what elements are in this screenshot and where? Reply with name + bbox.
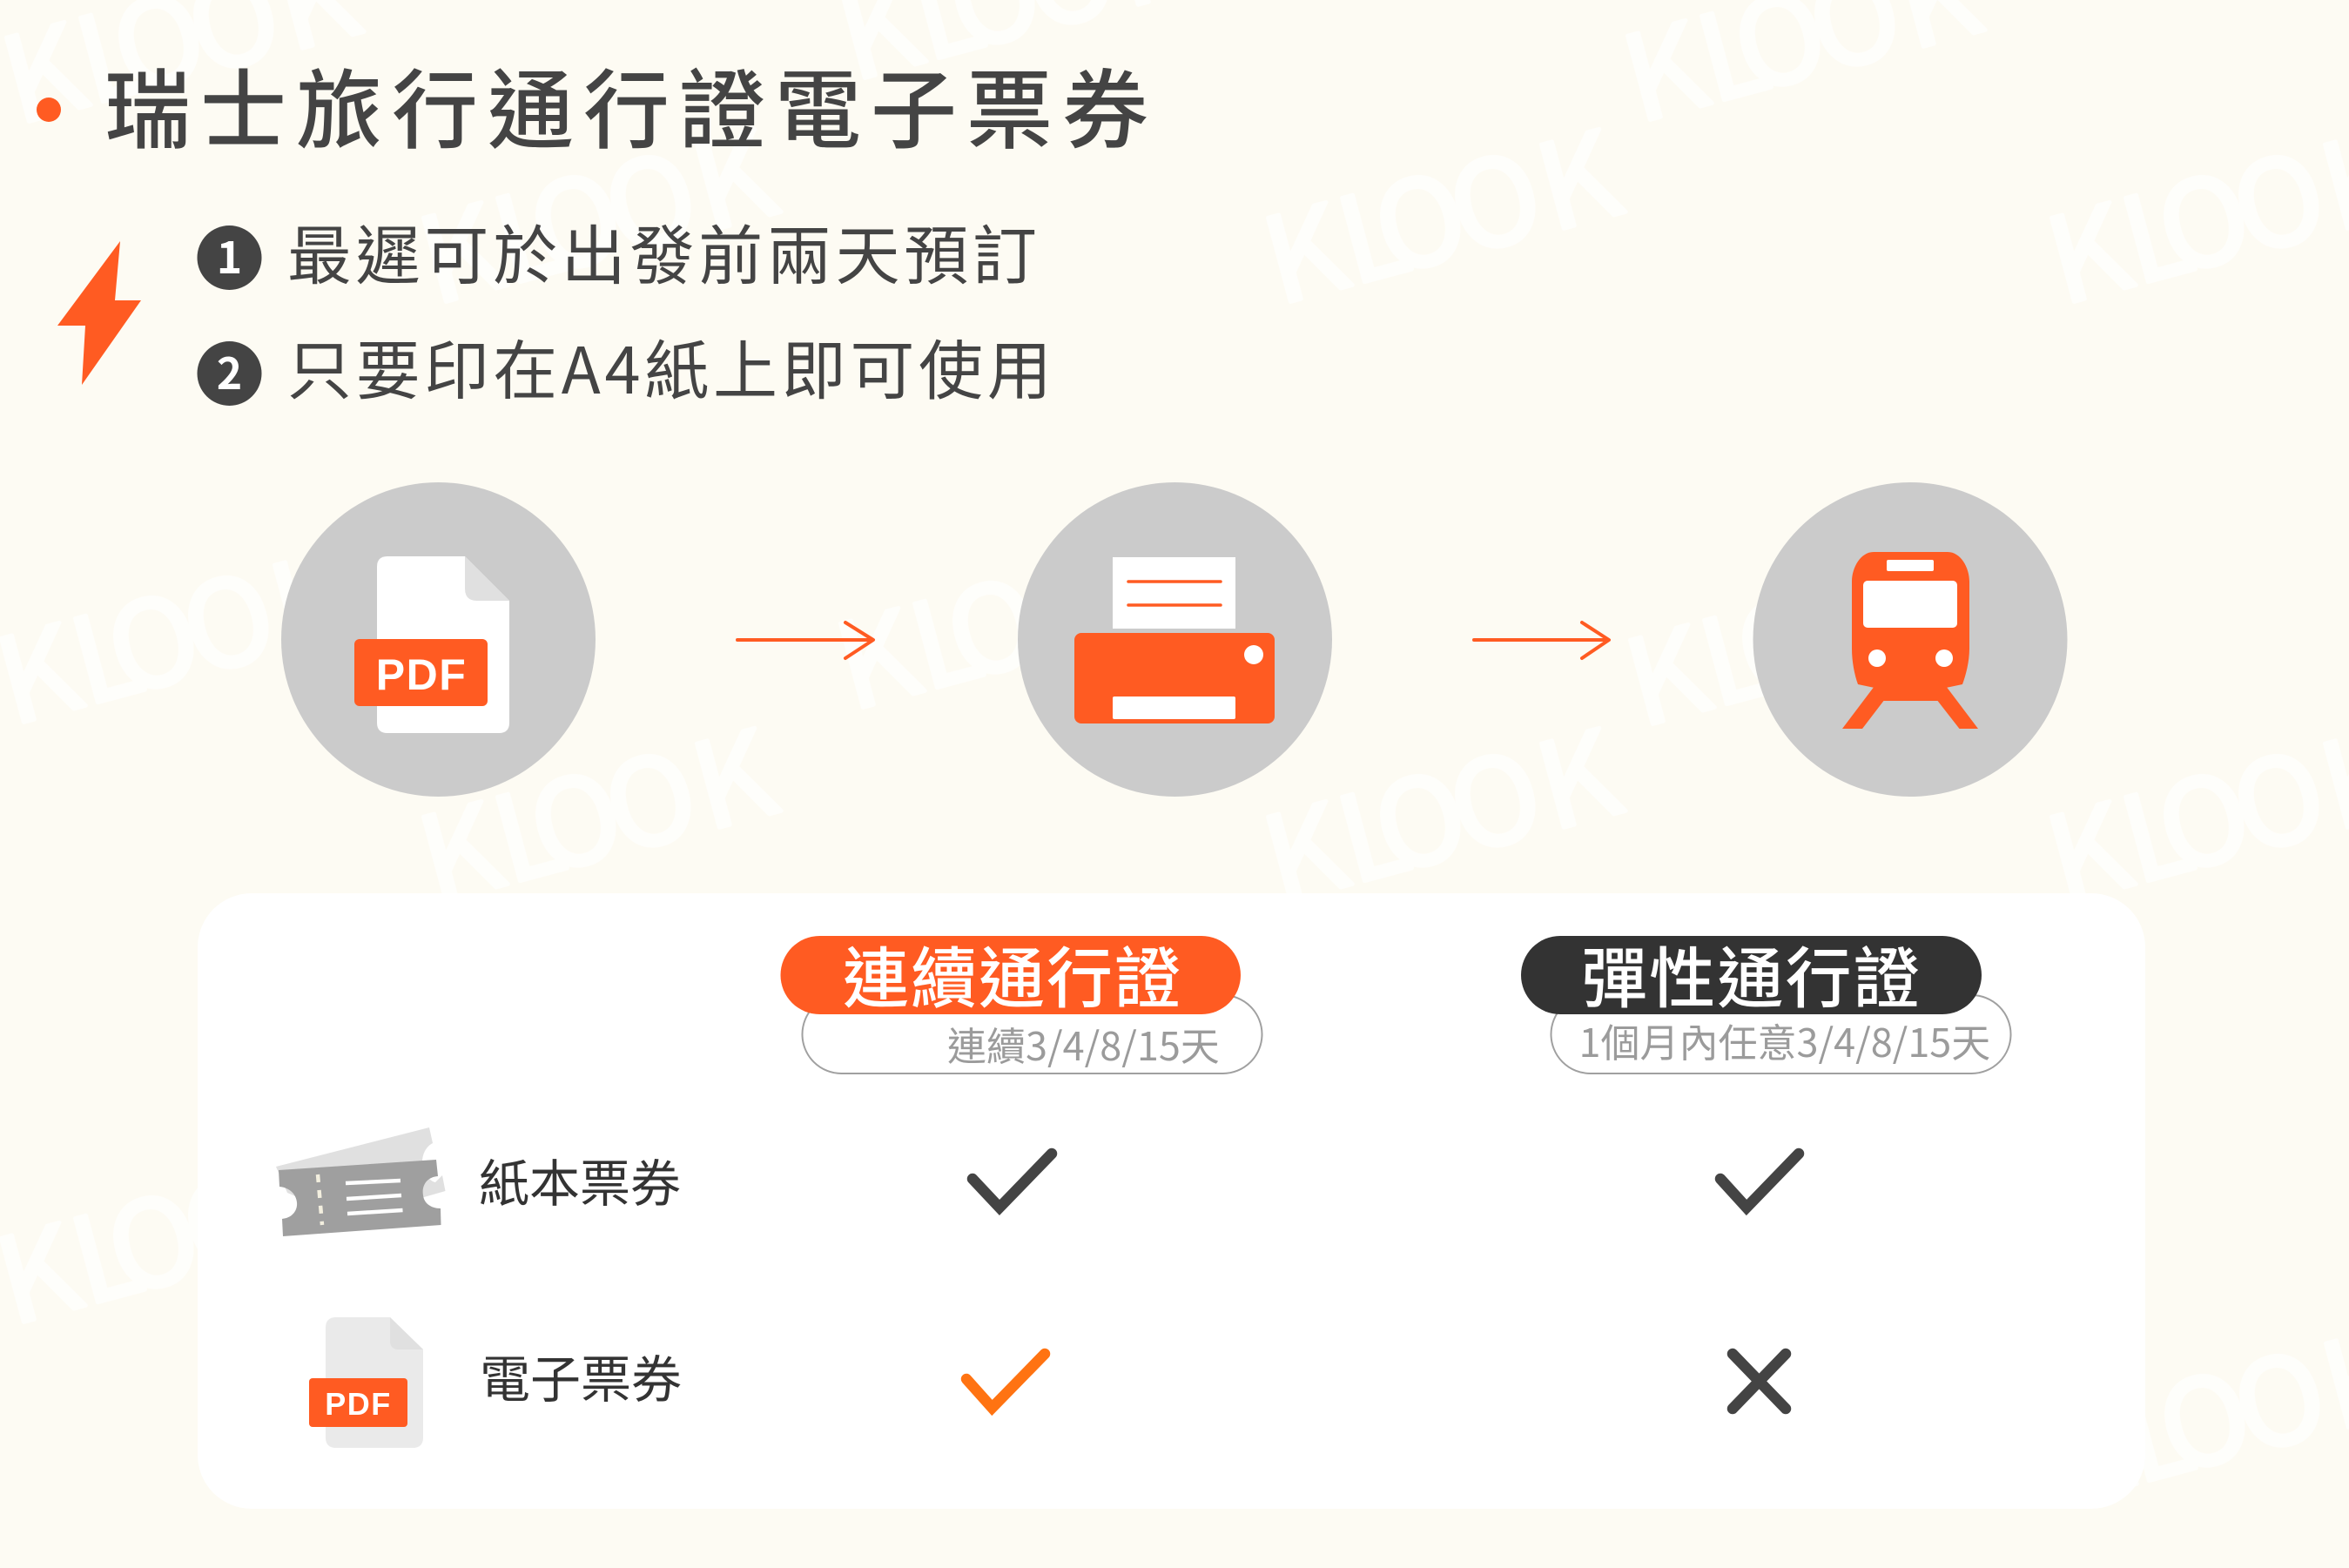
icon: PDF file small	[309, 1317, 423, 1448]
panel: ticket comparison table	[198, 893, 2145, 1509]
duration text: 1個月內任意3/4/8/15天	[1579, 1012, 1990, 1068]
heading pill	[780, 936, 1241, 1014]
card background	[198, 893, 2145, 1509]
KLOOK watermark pattern: KLOOK	[399, 678, 791, 938]
arrow: printer to train	[1474, 622, 1609, 658]
KLOOK watermark pattern: KLOOK	[816, 485, 1208, 744]
icon: PDF file small: PDF	[325, 1386, 392, 1422]
icon: check (flexi pass, paper)	[1720, 1154, 1799, 1208]
row label: paper ticket: 紙本票券	[479, 1143, 681, 1216]
note text 2: 只要印在A4紙上即可使用	[287, 320, 1055, 413]
step 2 note	[197, 320, 1055, 413]
arrow: PDF to printer	[737, 622, 873, 658]
title bullet dot	[37, 98, 61, 122]
duration outline pill	[803, 995, 1262, 1073]
number badge 2	[197, 340, 261, 406]
column header: consecutive pass	[780, 925, 1262, 1073]
number badge 1	[197, 224, 261, 290]
column header: flexi pass	[1521, 925, 2011, 1073]
icon: cross (flexi pass, e-ticket)	[1733, 1354, 1786, 1409]
row label: e-ticket: 電子票券	[480, 1339, 682, 1412]
heading pill	[1521, 936, 1982, 1014]
icon: printer in grey circle	[1018, 482, 1332, 797]
KLOOK watermark pattern: KLOOK	[399, 79, 791, 339]
note text 1: 最遲可於出發前兩天預訂	[287, 205, 1041, 298]
icon: paper tickets	[276, 1127, 446, 1236]
duration outline pill	[1551, 995, 2011, 1073]
duration text: 連續3/4/8/15天	[947, 1015, 1220, 1072]
number badge 1: 1	[217, 224, 242, 286]
KLOOK watermark pattern: KLOOK	[1605, 501, 1997, 761]
icon: train in grey circle	[1753, 482, 2067, 797]
icon: PDF file in grey circle: PDF	[376, 650, 467, 699]
title: 瑞士旅行通行證電子票券	[104, 41, 1158, 166]
icon: PDF file in grey circle	[281, 482, 596, 797]
KLOOK watermark pattern: KLOOK	[1243, 678, 1635, 938]
icon: check (consecutive pass, paper)	[973, 1154, 1052, 1208]
step 1 note	[197, 205, 1041, 298]
icon: orange check (consecutive pass, e-ticket)	[966, 1354, 1045, 1408]
icon: lightning bolt	[57, 241, 141, 385]
number badge 2: 2	[217, 340, 242, 402]
heading text: 連續通行證	[843, 925, 1182, 1021]
heading text: 彈性通行證	[1581, 925, 1922, 1021]
KLOOK watermark pattern: KLOOK	[1243, 79, 1635, 339]
